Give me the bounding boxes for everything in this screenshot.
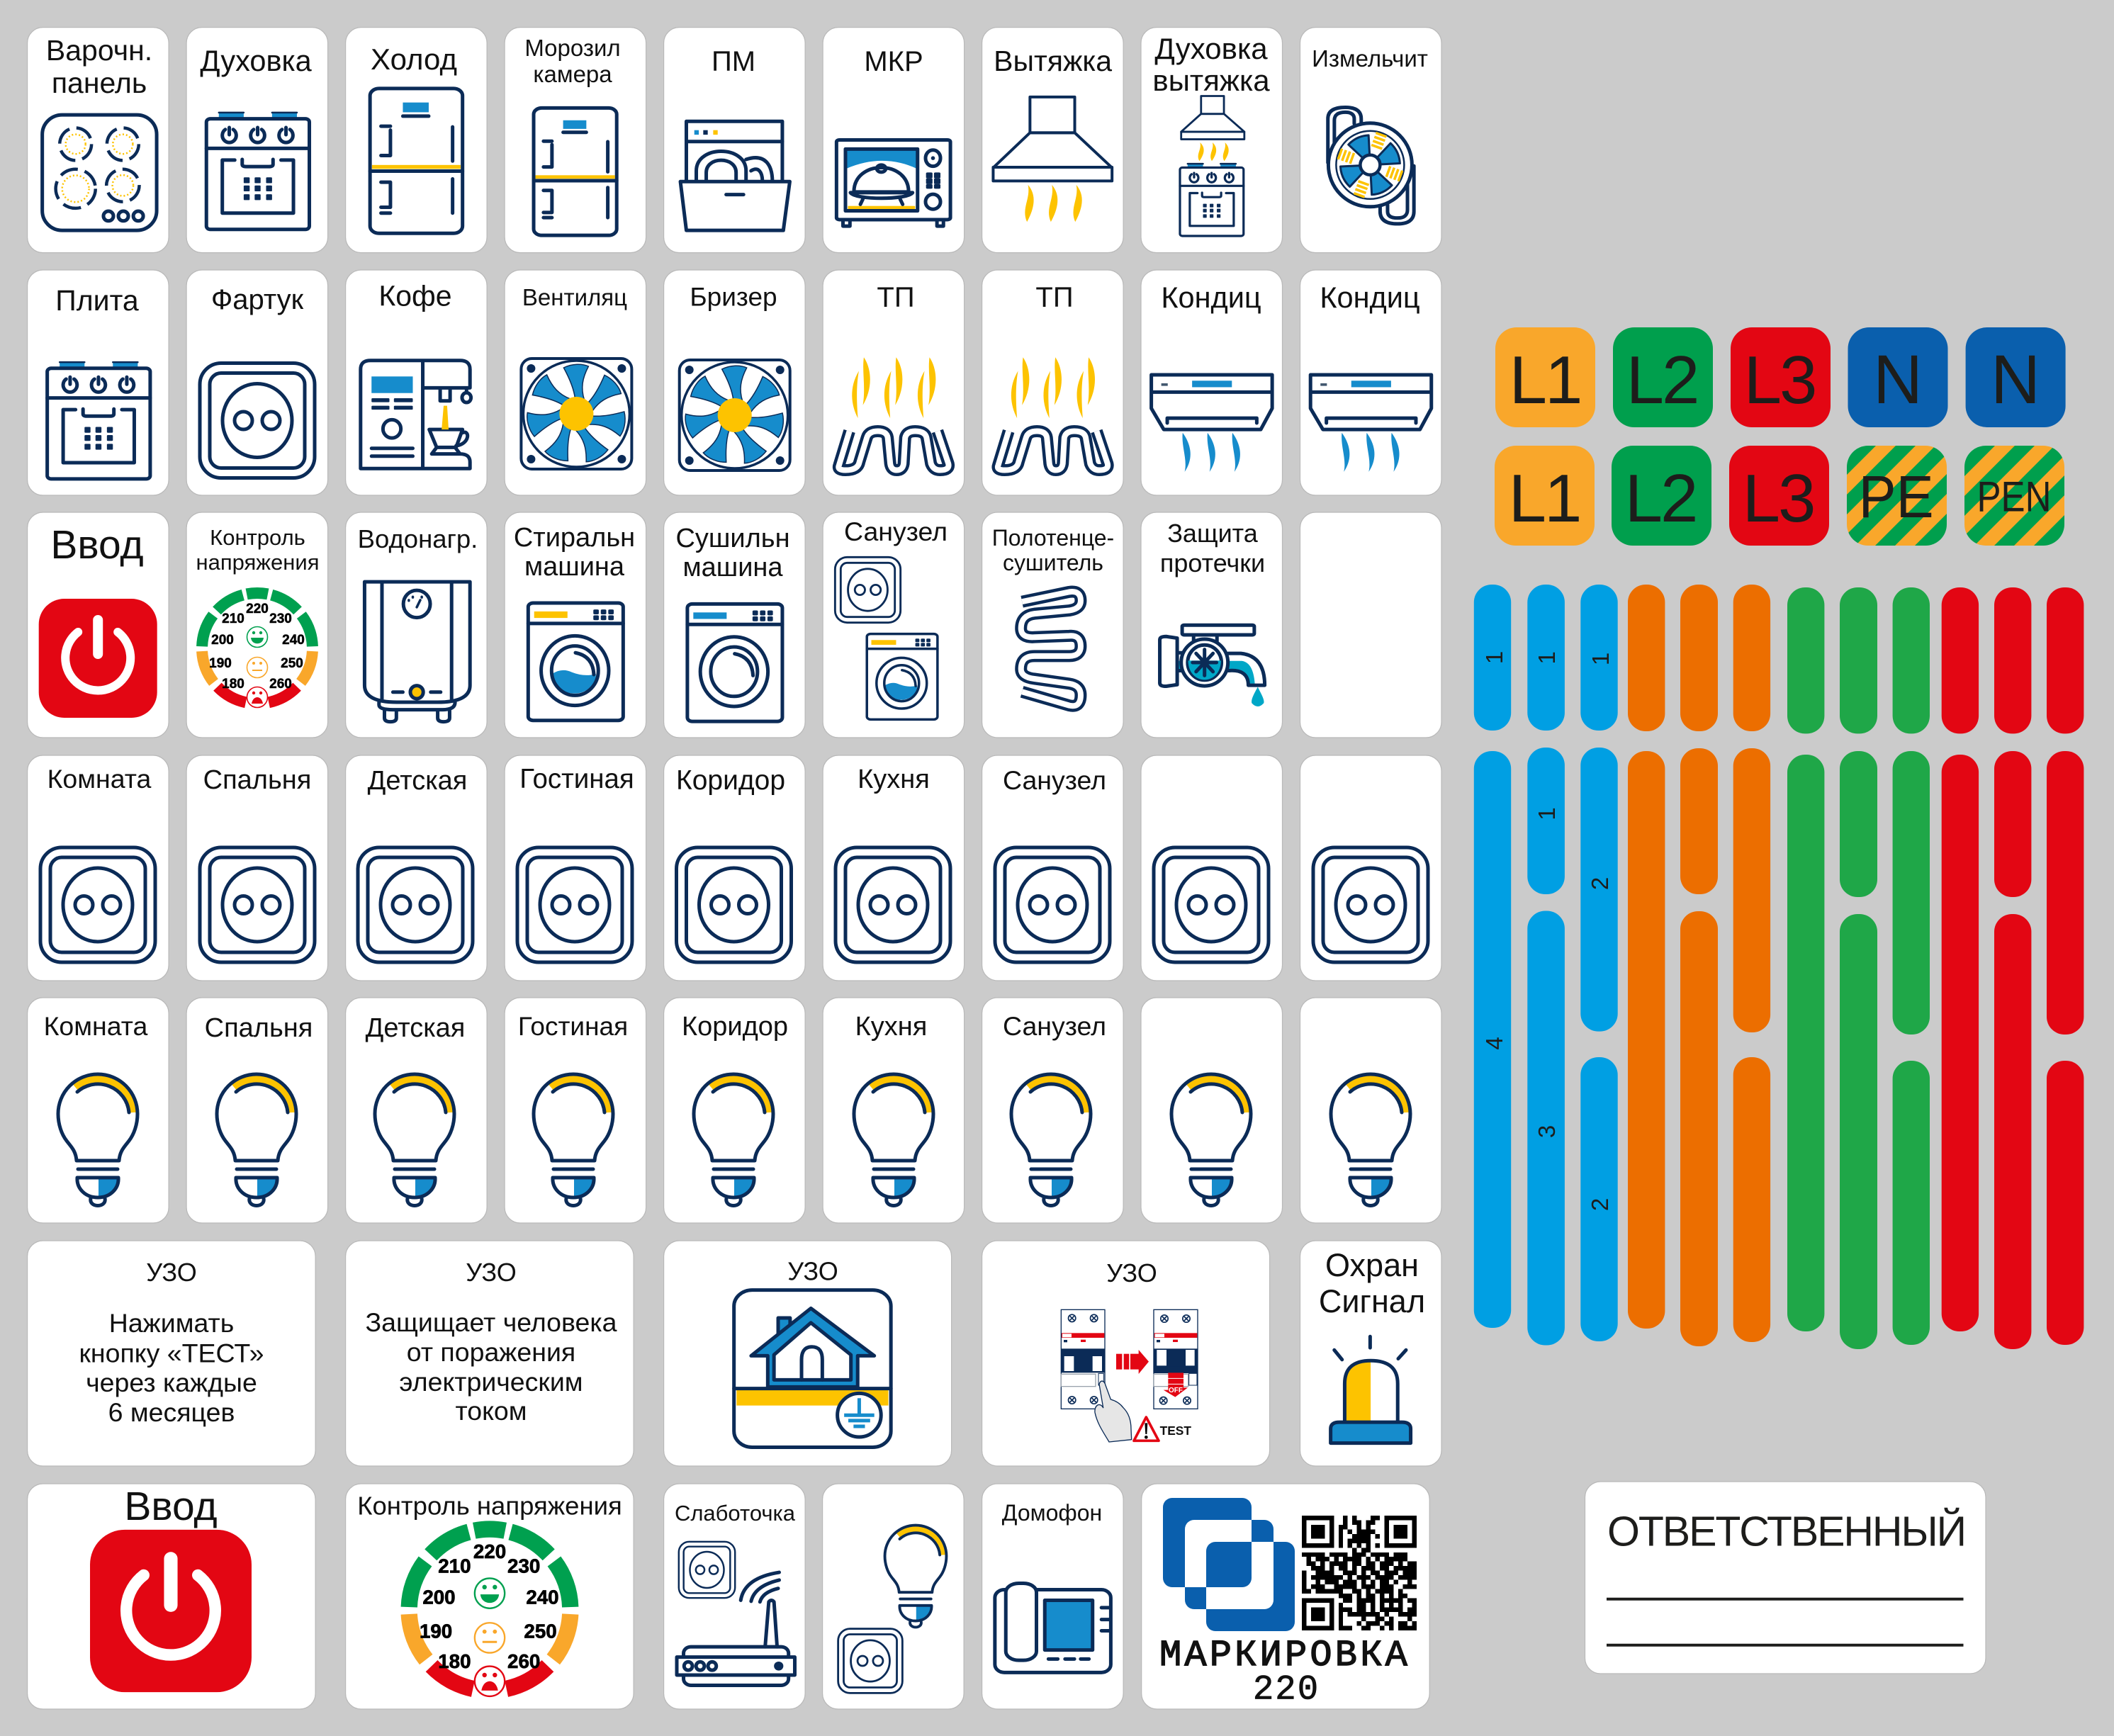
label N: N [1991,341,2040,418]
card: Санузел [823,512,965,738]
label: сушитель [1003,550,1103,575]
card: МКР [823,28,965,253]
card: Фартук [186,270,328,495]
label N [1848,327,1947,427]
cable strips: green [1787,587,1930,1349]
label L1 [1495,327,1595,427]
icon: socket [838,1629,902,1693]
icon: small hood [1181,96,1244,161]
icon: leak valve [1160,625,1265,706]
gauge: 260 [507,1650,540,1672]
text block: 6 месяцев [108,1397,235,1427]
label: УЗО [787,1257,838,1285]
label: Фартук [211,284,304,315]
icon: air conditioner [1310,375,1432,472]
card: Ввод large [28,1484,315,1709]
label: машина [524,552,625,582]
gauge: 250 [524,1620,557,1642]
label: Водонагр. [358,524,478,553]
strip numbers: 1 [1587,653,1614,665]
card: Ввод small [28,512,169,738]
label: Кофе [378,280,452,312]
card: Спальня: Спальня [203,765,311,795]
heading: ОТВЕТСТВЕННЫЙ [1607,1508,1967,1555]
label L3 [1729,446,1829,546]
card: Сушильн машина [664,512,805,738]
label: Морозил [524,35,621,61]
card: socket blank 1 [1141,755,1283,981]
label L1: L1 [1509,461,1580,536]
strip numbers [1481,651,1614,1211]
text block: кнопку «ТЕСТ» [79,1338,264,1368]
card: Стиральн машина [505,512,646,738]
label: Ввод [124,1484,218,1529]
card: Охран Сигнал [1300,1241,1441,1466]
card: Измельчит [1300,28,1441,253]
icon: dryer [687,604,782,721]
card: Домофон [982,1484,1123,1709]
label: Измельчит [1312,45,1428,72]
card: Гостиная: Гостиная [518,1012,628,1041]
card: Духовка вытяжка [1141,28,1283,253]
text block: от поражения [407,1337,575,1367]
label: Домофон [1002,1500,1102,1526]
icon: bulb [885,1526,946,1627]
label: панель [52,67,147,99]
icon: house with earth [734,1290,891,1447]
gauge: 240 [282,633,305,648]
card: Вентиляц [505,270,646,495]
icon: socket [679,1542,735,1598]
card: УЗО test diagram [982,1241,1270,1466]
icon: washer [867,634,938,719]
icon: air conditioner [1152,375,1272,472]
gauge: 240 [526,1586,559,1608]
label: машина [682,553,783,582]
card: Детская [346,755,487,981]
icon: power button [90,1530,252,1692]
label: Вытяжка [994,45,1112,77]
icon: towel rail [1021,592,1081,706]
label: Бризер [690,283,777,312]
label: МКР [864,46,923,77]
label: Кондиц [1161,281,1261,314]
text block: УЗО [466,1258,517,1287]
label PE [1847,446,1947,546]
label L1: L1 [1509,342,1580,418]
icon: socket [835,557,901,623]
label L2: L2 [1626,342,1697,418]
gauge: 190 [209,656,232,671]
label: Варочн. [46,34,152,67]
label: Стиральн [514,523,635,553]
label L3: L3 [1743,461,1814,536]
card: Кухня: Кухня [855,1012,927,1042]
label: Полотенце- [992,525,1114,551]
label L1 [1495,446,1595,546]
gauge: 200 [422,1586,456,1608]
label: Санузел [844,517,948,546]
card: Вытяжка [982,28,1123,253]
card: Защита протечки [1141,512,1283,738]
gauge: 210 [222,611,244,626]
gauge: 230 [507,1555,540,1577]
card: bulb blank 1 [1141,998,1283,1223]
icon: microwave [836,140,950,226]
label: Вентиляц [522,284,627,310]
label: Кондиц [1320,281,1420,314]
strip numbers: 1 [1534,651,1560,664]
strip numbers: 4 [1481,1037,1507,1050]
label N: N [1873,341,1923,418]
row: sockets [28,755,1441,981]
icon: oven [206,113,310,230]
card: УЗО text test [28,1241,315,1466]
label L2: L2 [1625,461,1696,536]
diagram: RCD test [1061,1309,1198,1442]
card: bulb blank 2 [1300,998,1441,1223]
card: bulb and socket [823,1484,964,1709]
label PE: PE [1859,463,1934,530]
card: socket blank 2 [1300,755,1441,981]
gauge: 210 [438,1555,471,1577]
gauge: 230 [269,611,292,626]
icon: intercom [995,1583,1111,1672]
label: Сигнал [1319,1283,1425,1319]
label L3 [1731,327,1831,427]
card: Комната: Комната [44,1011,148,1041]
card: ПМ [664,28,805,253]
card: Слаботочка [664,1484,805,1709]
cable strips: red [1942,587,2084,1349]
card: Кондиц 2 [1300,270,1441,495]
label: Слаботочка [675,1501,796,1526]
card: Контроль напряжения large [346,1484,634,1709]
icon: food shredder [1328,108,1414,224]
card: Коридор: Коридор [676,765,785,796]
label: ТП [1035,282,1074,313]
gauge: 220 [246,602,269,616]
card: Холод [346,28,487,253]
icon: siren [1331,1336,1411,1443]
label: Сушильн [675,524,790,553]
label PEN [1964,446,2064,546]
card: УЗО house [664,1241,952,1466]
text block: УЗО [146,1258,197,1287]
text block: Защищает человека [366,1307,617,1337]
card: Санузел: Санузел [1003,1011,1106,1041]
icon: washing machine [528,603,623,721]
card: УЗО text protection [346,1241,634,1466]
text block: электрическим [399,1367,583,1397]
diagram: RCD test: TEST [1160,1424,1191,1438]
card: Детская: Детская [368,766,467,796]
icon: hood [993,97,1112,222]
label: Духовка [1154,32,1268,65]
icon: coffee machine [361,361,471,468]
card: ТП 2 [982,270,1123,495]
gauge: 260 [269,677,292,692]
brand number: 220 [1253,1670,1320,1710]
card: Кухня [823,755,965,981]
gauge: 220 [473,1540,506,1562]
label PEN: PEN [1977,473,2051,521]
strip numbers: 2 [1587,877,1613,890]
icon: freezer [534,108,617,235]
gauge: 190 [420,1620,452,1642]
QR code [1302,1516,1417,1630]
card: Гостиная: Гостиная [519,764,634,794]
card: Санузел [982,998,1123,1223]
icon: small oven [1180,164,1244,236]
card: Бризер [664,270,805,495]
row: bulbs [28,998,1441,1223]
phase labels [1495,327,2066,546]
label: напряжения [196,550,320,575]
brand text: МАРКИРОВКА [1159,1635,1410,1676]
text block: через каждые [86,1368,257,1397]
gauge: 180 [438,1650,471,1672]
icon: water heater [364,582,470,722]
label: протечки [1160,548,1265,577]
label: УЗО [1106,1258,1157,1287]
card: empty [1300,512,1441,738]
label N [1966,327,2066,427]
card: Ответственный [1585,1482,1986,1674]
text block: током [455,1396,527,1426]
gauge [409,1529,570,1696]
logo [1163,1498,1295,1631]
label: ТП [877,282,915,313]
card: Спальня: Спальня [205,1013,313,1043]
icon: router [677,1572,794,1685]
gauge: 200 [211,633,234,648]
label: Охран [1325,1247,1419,1283]
strip numbers: 1 [1481,651,1507,664]
gauge [202,593,313,707]
label: Контроль [210,525,305,550]
cable strips: orange [1628,585,1770,1346]
label L3: L3 [1744,342,1815,418]
icon: fan [521,359,631,469]
card: Кухня: Кухня [858,765,930,794]
text block: Нажимать [109,1308,234,1338]
icon: floor heating [838,357,949,470]
card: Контроль напряжения small [186,512,328,738]
card: Варочн. панель [28,28,169,253]
label: Холод [371,43,457,76]
card: Санузел: Санузел [1003,765,1106,795]
card: Детская: Детская [366,1013,465,1043]
cable strips: blue [1474,585,1618,1345]
label: Защита [1167,519,1259,548]
card: Гостиная [505,998,646,1223]
icon: socket [200,363,315,478]
icon: cooktop [43,115,157,230]
gauge: 250 [281,656,303,671]
card: Духовка [186,28,328,253]
label L2 [1612,446,1711,546]
card: Кухня [823,998,965,1223]
diagram: RCD test: OFF [1169,1387,1183,1394]
card: Коридор: Коридор [682,1012,788,1042]
label: Духовка [200,44,313,77]
label: вытяжка [1152,64,1270,97]
strip numbers: 3 [1534,1125,1560,1138]
label: Ввод [50,522,144,568]
label: Контроль напряжения [357,1492,622,1521]
card: Морозил камера [505,28,646,253]
strip numbers: 1 [1534,807,1560,821]
icon: power button [39,599,157,718]
card: Детская [346,998,487,1223]
card: Комната: Комната [47,764,152,794]
card: Маркировка 220 [1142,1484,1429,1710]
card: Комната [28,998,169,1223]
label: камера [533,61,612,87]
card: Кондиц 1 [1141,270,1283,495]
card: Коридор [664,755,805,981]
label: ПМ [712,46,755,77]
label: Плита [55,284,139,317]
card: Спальня [186,998,328,1223]
card: Водонагр. [346,512,487,738]
card: Санузел [982,755,1123,981]
strip numbers: 2 [1587,1198,1613,1211]
icon: stove [47,362,150,479]
card: Спальня [186,755,328,981]
icon: breather fan [680,360,790,470]
icon: floor heating [998,357,1108,470]
card: ТП 1 [823,270,965,495]
card: Плита [28,270,169,495]
icon: fridge [370,89,463,233]
card: Гостиная [505,755,646,981]
icon: dishwasher [680,121,789,230]
card: Кофе [346,270,487,495]
label L2 [1613,327,1713,427]
card: Комната [28,755,169,981]
card: Полотенцесушитель [982,512,1123,738]
card: Коридор [664,998,805,1223]
signature lines [1607,1599,1963,1645]
gauge: 180 [222,677,244,692]
